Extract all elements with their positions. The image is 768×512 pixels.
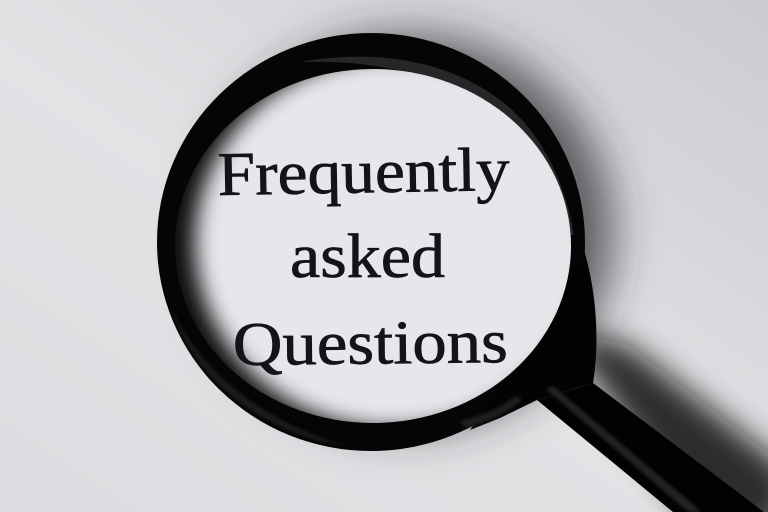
glass lens with shaded edge [175, 69, 571, 423]
ring lower-left sheen [170, 305, 350, 447]
magnifier handle [537, 383, 764, 512]
word: asked: asked [290, 223, 445, 291]
magnifying glass photo [157, 0, 768, 512]
word: Frequently: Frequently [217, 136, 510, 209]
lens lit area [195, 55, 593, 429]
ring shadow on paper [202, 34, 614, 430]
handle shadow on paper [560, 330, 768, 512]
ring to handle joint [470, 250, 596, 430]
handle highlight [546, 386, 702, 512]
ring inner upper-right bevel [300, 57, 574, 235]
magnified text [217, 136, 510, 379]
magnifier ring [157, 33, 596, 451]
ring lower sheen [460, 396, 522, 428]
word: Questions: Questions [232, 308, 508, 379]
